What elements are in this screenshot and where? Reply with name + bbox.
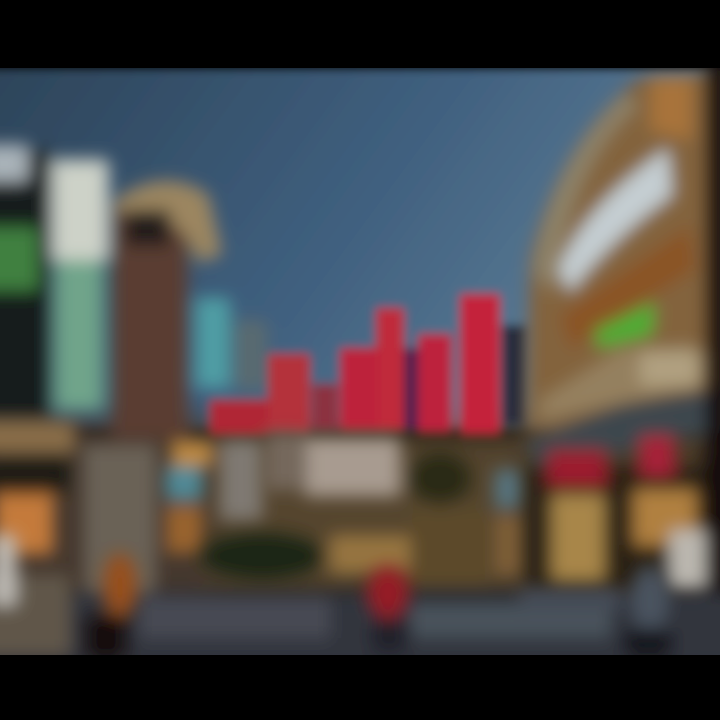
right building: [525, 60, 720, 660]
lower mid background: [0, 420, 720, 610]
top letterbox bar: [0, 0, 720, 68]
red towers: [210, 294, 526, 434]
sky: [0, 68, 720, 428]
ground: [0, 535, 720, 672]
left buildings: [0, 145, 267, 610]
bottom letterbox bar: [0, 655, 720, 720]
mid street blocks: [200, 432, 523, 585]
people: [86, 553, 670, 660]
